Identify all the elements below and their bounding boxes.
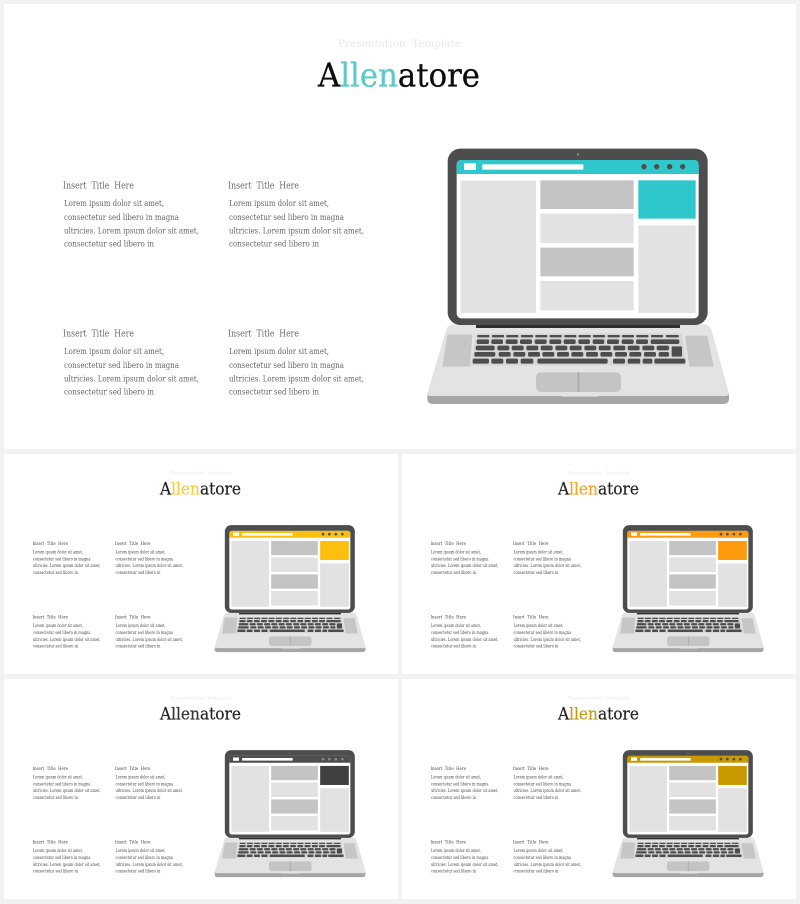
text block: top right — [513, 766, 581, 801]
text block: bottom left — [32, 840, 100, 874]
text block: top right — [228, 181, 364, 250]
icon: laptop orange — [613, 525, 763, 652]
text block: top left — [430, 766, 498, 801]
text block: bottom right — [513, 615, 581, 649]
text block: bottom right — [115, 615, 183, 649]
icon: laptop dark — [215, 750, 365, 877]
text block: top right — [115, 541, 183, 576]
subtitle: Presentation Template — [170, 696, 232, 702]
text block: bottom right — [115, 840, 183, 874]
title: Allenatore — [159, 479, 241, 498]
text block: top left — [430, 541, 498, 576]
text block: bottom right — [513, 840, 581, 874]
panel: slide yellow — [4, 454, 398, 674]
subtitle: Presentation Template — [338, 39, 461, 50]
title: Allenatore — [317, 56, 480, 95]
text block: top left — [63, 181, 199, 250]
title: Allenatore — [557, 479, 639, 498]
text block: bottom left — [63, 329, 199, 398]
text block: top left — [32, 541, 100, 576]
title: Allenatore — [159, 704, 241, 723]
panel: slide gold — [402, 679, 796, 899]
subtitle: Presentation Template — [568, 471, 630, 477]
subtitle: Presentation Template — [568, 696, 630, 702]
text block: top right — [513, 541, 581, 576]
icon: laptop yellow — [215, 525, 365, 652]
text block: bottom left — [430, 615, 498, 649]
subtitle: Presentation Template — [170, 471, 232, 477]
text block: top left — [32, 766, 100, 801]
title: Allenatore — [557, 704, 639, 723]
text block: top right — [115, 766, 183, 801]
text block: bottom left — [430, 840, 498, 874]
text block: bottom left — [32, 615, 100, 649]
panel: main slide teal — [4, 4, 796, 449]
text block: bottom right — [228, 329, 364, 398]
icon: laptop gold — [613, 750, 763, 877]
icon: laptop teal — [427, 149, 729, 404]
panel: slide dark — [4, 679, 398, 899]
panel: slide orange — [402, 454, 796, 674]
